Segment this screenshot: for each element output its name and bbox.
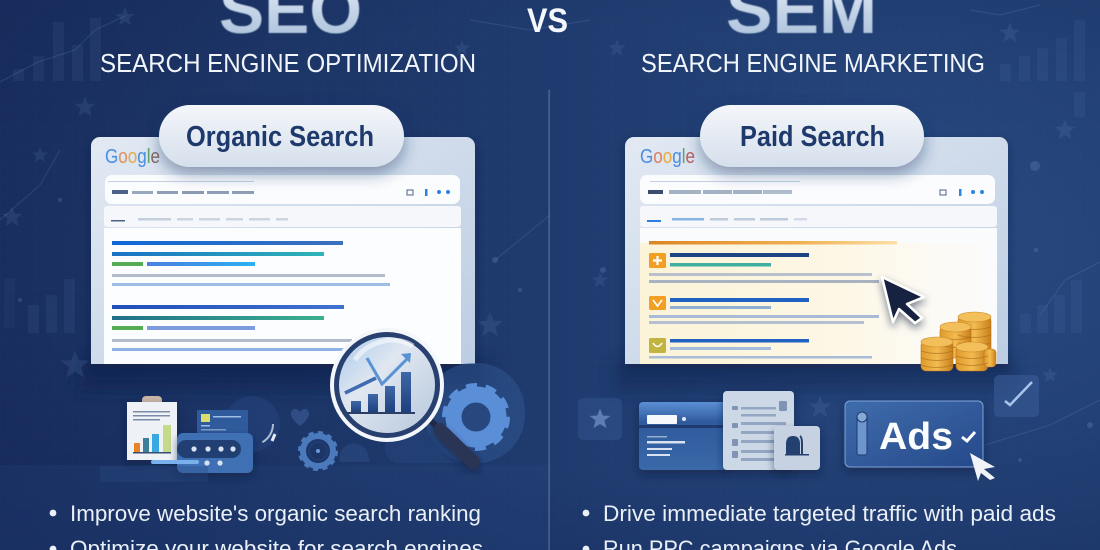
list: SEO benefits: Improve website's organic search ranking	[70, 501, 481, 526]
icon: check tile	[994, 375, 1039, 417]
organic result one	[112, 241, 390, 286]
lens bar chart	[345, 353, 415, 414]
icon: ads button: Ads	[879, 416, 953, 458]
icon: heart	[291, 409, 309, 426]
tab bar	[640, 206, 997, 227]
pill: paid search: Paid Search	[740, 121, 885, 153]
list: SEM benefits	[583, 501, 1056, 550]
results page	[104, 228, 461, 364]
pill: organic search	[159, 105, 404, 167]
icon: gear behind magnifier	[385, 363, 525, 463]
results page	[640, 228, 997, 364]
pill: organic search: Organic Search	[186, 121, 374, 153]
search bar	[640, 175, 995, 204]
google logo: Google	[640, 146, 695, 168]
icon: coin stacks	[921, 312, 996, 371]
paid result one	[649, 253, 879, 283]
icon: white cursor	[970, 453, 995, 481]
icon: ads button	[845, 401, 983, 467]
ad highlight area	[640, 243, 987, 364]
subtitle: search engine marketing: SEARCH ENGINE MARKETING	[641, 48, 985, 78]
icon: faded star tile	[578, 398, 622, 440]
icon: cursor arrow	[882, 277, 924, 323]
search bar	[105, 175, 460, 204]
pill: paid search	[700, 105, 924, 167]
icon: small gear	[300, 433, 370, 469]
tab bar	[104, 206, 461, 227]
list: SEO benefits	[50, 501, 483, 550]
google logo: Google	[105, 146, 160, 168]
icon: clipboard report	[127, 396, 177, 460]
icon: circular gauge	[224, 396, 280, 452]
list: SEM benefits: Drive immediate targeted traffic with paid ads	[603, 501, 1056, 526]
orange ad strip	[649, 241, 897, 244]
panel: SEO browser window	[91, 137, 475, 364]
icon: notification tile	[774, 426, 820, 470]
lens highlight	[355, 340, 413, 360]
paid result three	[649, 338, 872, 358]
icon: seo dashboard cards	[100, 410, 253, 482]
icon: magnifying glass with chart	[330, 328, 473, 462]
icon: ad dashboard card	[639, 402, 727, 470]
vs label: VS	[527, 2, 568, 40]
organic result two	[112, 305, 352, 351]
paid result two	[649, 296, 879, 324]
panel: SEM browser window	[625, 137, 1008, 364]
subtitle: search engine optimization: SEARCH ENGINE OPTIMIZATION	[100, 48, 476, 78]
icon: report sheet	[723, 391, 794, 470]
